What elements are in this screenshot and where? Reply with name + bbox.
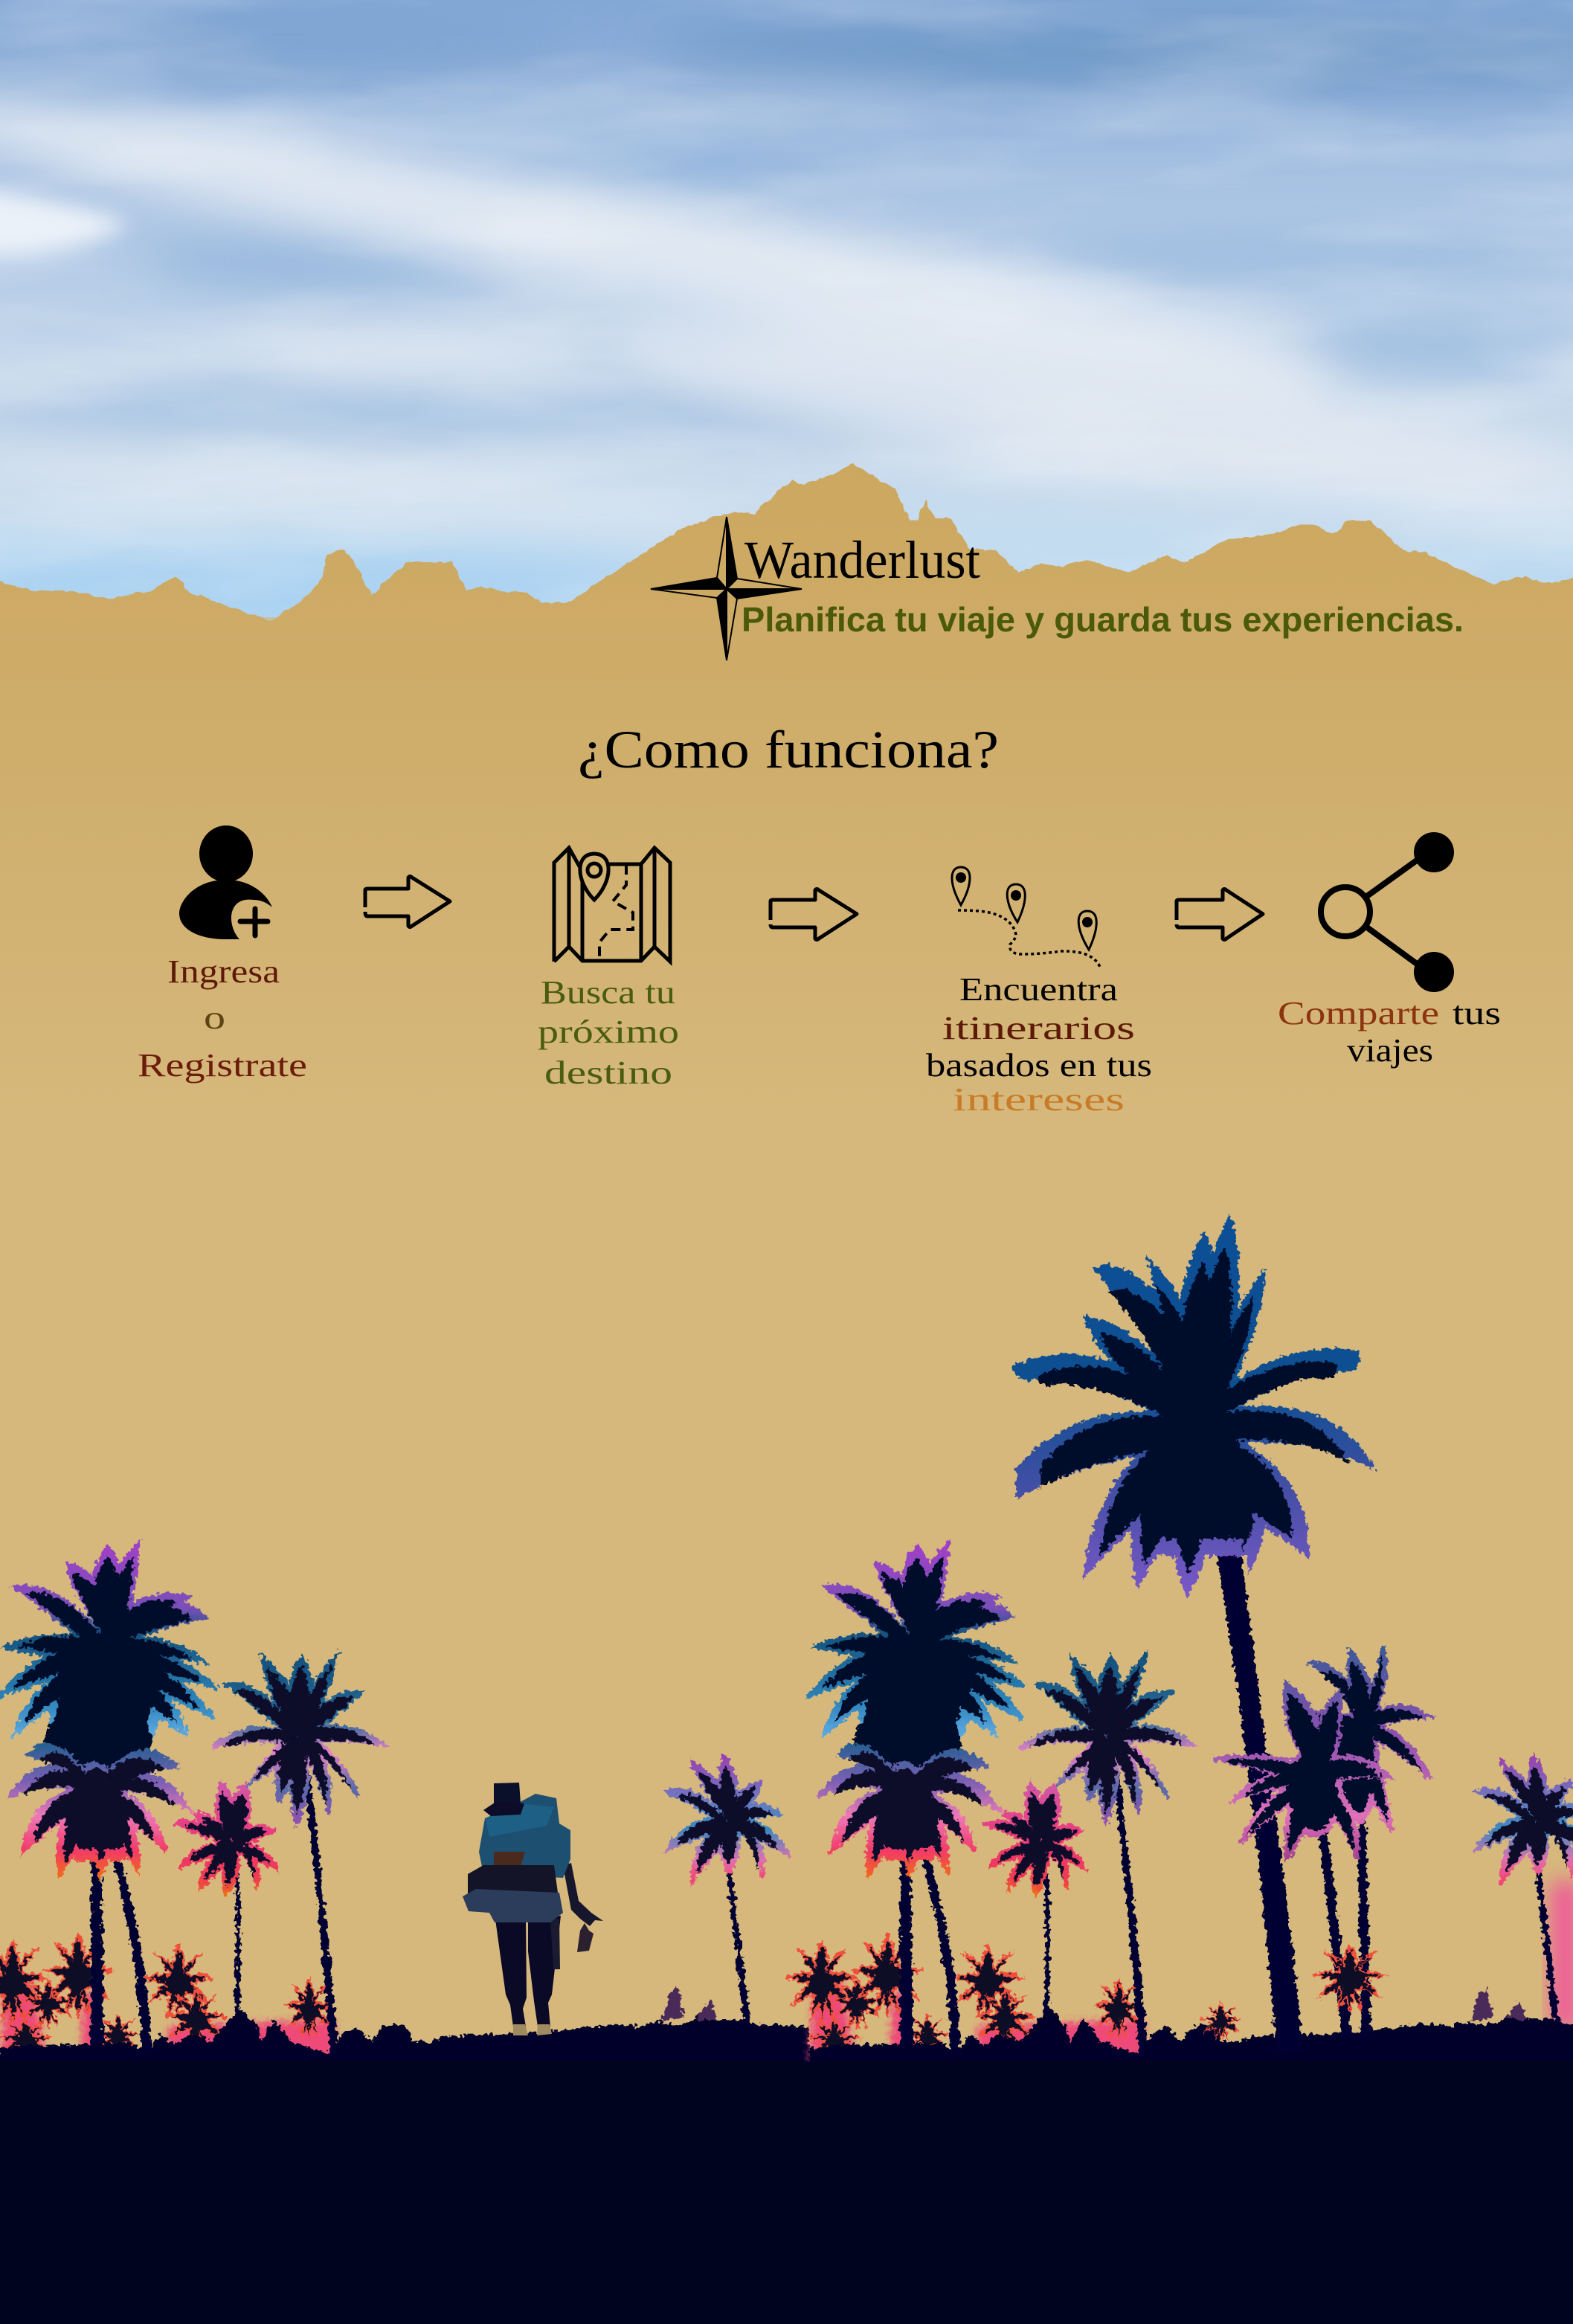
step 1 text: o xyxy=(204,1000,225,1036)
twin palm trees xyxy=(1203,1647,1430,2040)
step 4 text: tus xyxy=(1453,995,1501,1031)
icon: folded map with pin xyxy=(554,848,670,962)
sand background lower xyxy=(0,640,1573,2324)
icon: route with three pins xyxy=(952,867,1101,969)
arrow 1 xyxy=(365,876,450,927)
step 1 text: Ingresa xyxy=(167,953,280,990)
heading: Como funciona: ¿Como funciona? xyxy=(578,720,999,779)
step 4 text: Comparte xyxy=(1278,995,1439,1031)
compass star logo xyxy=(651,517,802,660)
hero palm tree xyxy=(1013,1219,1374,2053)
step 3 text: basados en tus xyxy=(926,1047,1152,1084)
palm row right tile xyxy=(789,1544,1573,2075)
pink sky patch at right edge xyxy=(1551,1882,1573,2030)
step 3 text: Encuentra xyxy=(959,971,1118,1008)
step 1 text: Registrate xyxy=(138,1047,307,1084)
arrow 3 xyxy=(1177,889,1263,940)
step 4 text: viajes xyxy=(1347,1032,1433,1069)
step 2 text: próximo xyxy=(538,1014,679,1050)
step 2 text: destino xyxy=(544,1055,672,1091)
step 2 text: Busca tu xyxy=(541,974,675,1011)
arrow 2 xyxy=(771,889,857,940)
icon: user with plus xyxy=(179,825,272,939)
step 3 text: itinerarios xyxy=(942,1010,1135,1046)
hiker with backpack xyxy=(463,1783,603,2035)
step 3 text: intereses xyxy=(953,1081,1125,1118)
icon: share xyxy=(1321,832,1454,992)
dark ground xyxy=(0,2061,1573,2324)
mountain silhouette xyxy=(0,463,1573,654)
step 2 text xyxy=(538,974,679,1091)
step 4 text xyxy=(1278,995,1501,1069)
sky background xyxy=(0,0,1573,617)
title: Wanderlust: Wanderlust xyxy=(744,530,980,590)
palm row left tile xyxy=(0,1544,809,2075)
step 3 text xyxy=(926,971,1152,1118)
step 1 text xyxy=(138,953,307,1084)
tagline: Planifica tu viaje y guarda tus experiencias. xyxy=(742,600,1464,639)
